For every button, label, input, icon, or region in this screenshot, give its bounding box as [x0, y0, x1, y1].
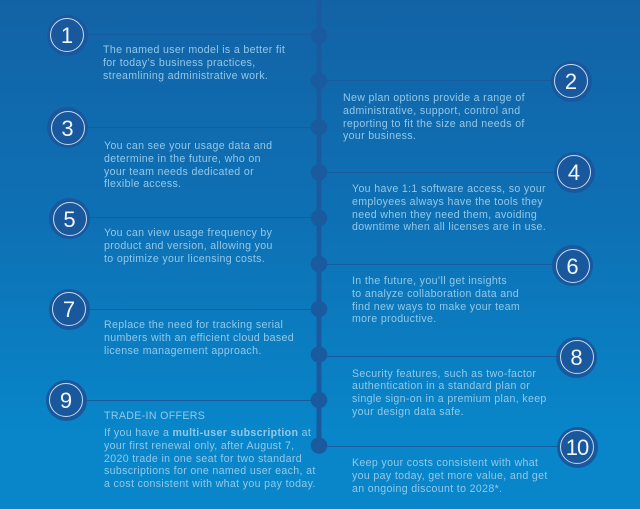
badge 6: 6: [566, 254, 579, 278]
text 10: you pay today, get more value, and get: [352, 470, 548, 482]
text 6: [352, 275, 520, 325]
text 3: flexible access.: [104, 178, 181, 190]
text 4: downtime when all licenses are in use.: [352, 221, 546, 233]
text 2: reporting to fit the size and needs of: [343, 118, 525, 130]
text 2: your business.: [343, 130, 416, 142]
text 2: [343, 92, 525, 142]
text 1: [103, 44, 285, 82]
text 4: You have 1:1 software access, so your: [352, 183, 546, 195]
text 8: [352, 368, 547, 418]
badge 9: 9: [60, 388, 72, 413]
text 4: [352, 183, 546, 233]
text 9: your first renewal only, after August 7,: [104, 440, 294, 452]
badge 7: [48, 288, 90, 330]
text 8: single sign-on in a premium plan, keep: [352, 393, 547, 405]
text 6: find new ways to make your team: [352, 301, 520, 313]
badge 1: [46, 14, 88, 56]
text 5: [104, 227, 273, 265]
text 4: need when they need them, avoiding: [352, 209, 537, 221]
text 6: In the future, you’ll get insights: [352, 275, 507, 287]
badge 2: [550, 60, 592, 102]
text 8: authentication in a standard plan or: [352, 380, 530, 392]
badge 1: 1: [61, 23, 73, 48]
badge 3: [47, 107, 88, 148]
text 3: [104, 140, 272, 190]
text 1: for today’s business practices,: [103, 57, 256, 69]
badge 7: 7: [63, 297, 75, 322]
text 5: to optimize your licensing costs.: [104, 253, 265, 265]
badge 3: 3: [61, 116, 74, 140]
badge 8: [556, 336, 597, 378]
text 3: determine in the future, who on: [104, 153, 261, 165]
text 9: subscriptions for one named user each, at: [104, 465, 316, 477]
text 3: You can see your usage data and: [104, 140, 272, 152]
badge 4: 4: [568, 160, 580, 185]
text 6: more productive.: [352, 313, 436, 325]
text 10: Keep your costs consistent with what: [352, 457, 538, 469]
text 1: The named user model is a better fit: [103, 44, 285, 56]
text 10: an ongoing discount to 2028*.: [352, 483, 502, 495]
text 7: [104, 319, 294, 357]
text 5: product and version, allowing you: [104, 240, 273, 252]
text 9: [104, 427, 316, 490]
badge 2: 2: [565, 69, 577, 94]
badge 5: [49, 198, 90, 239]
text 4: employees always have the tools they: [352, 196, 543, 208]
text 7: Replace the need for tracking serial: [104, 319, 283, 331]
badge 4: [554, 152, 594, 192]
text 5: You can view usage frequency by: [104, 227, 272, 239]
text 2: New plan options provide a range of: [343, 92, 525, 104]
text 10: [352, 457, 548, 495]
badge 8: 8: [570, 345, 583, 370]
text 9: a cost consistent with what you pay today.: [104, 478, 316, 490]
badge 10: [556, 426, 598, 468]
text 2: administrative, support, control and: [343, 105, 520, 117]
badge 6: [552, 245, 593, 286]
text 8: Security features, such as two-factor: [352, 368, 536, 380]
text 6: to analyze collaboration data and: [352, 288, 519, 300]
text 7: numbers with an efficient cloud based: [104, 332, 294, 344]
text 8: your design data safe.: [352, 406, 464, 418]
badge 5: 5: [63, 206, 76, 232]
text 9: 2020 trade in one seat for two standard: [104, 453, 302, 465]
text 3: your team needs dedicated or: [104, 166, 254, 178]
badge 10: 10: [566, 435, 588, 460]
text 7: license management approach.: [104, 345, 262, 357]
badge 9: [46, 380, 86, 420]
heading: trade-in offers: TRADE-IN OFFERS: [104, 410, 205, 422]
text 9: If you have a multi-user subscription at: [104, 427, 311, 439]
text 1: streamlining administrative work.: [103, 70, 268, 82]
